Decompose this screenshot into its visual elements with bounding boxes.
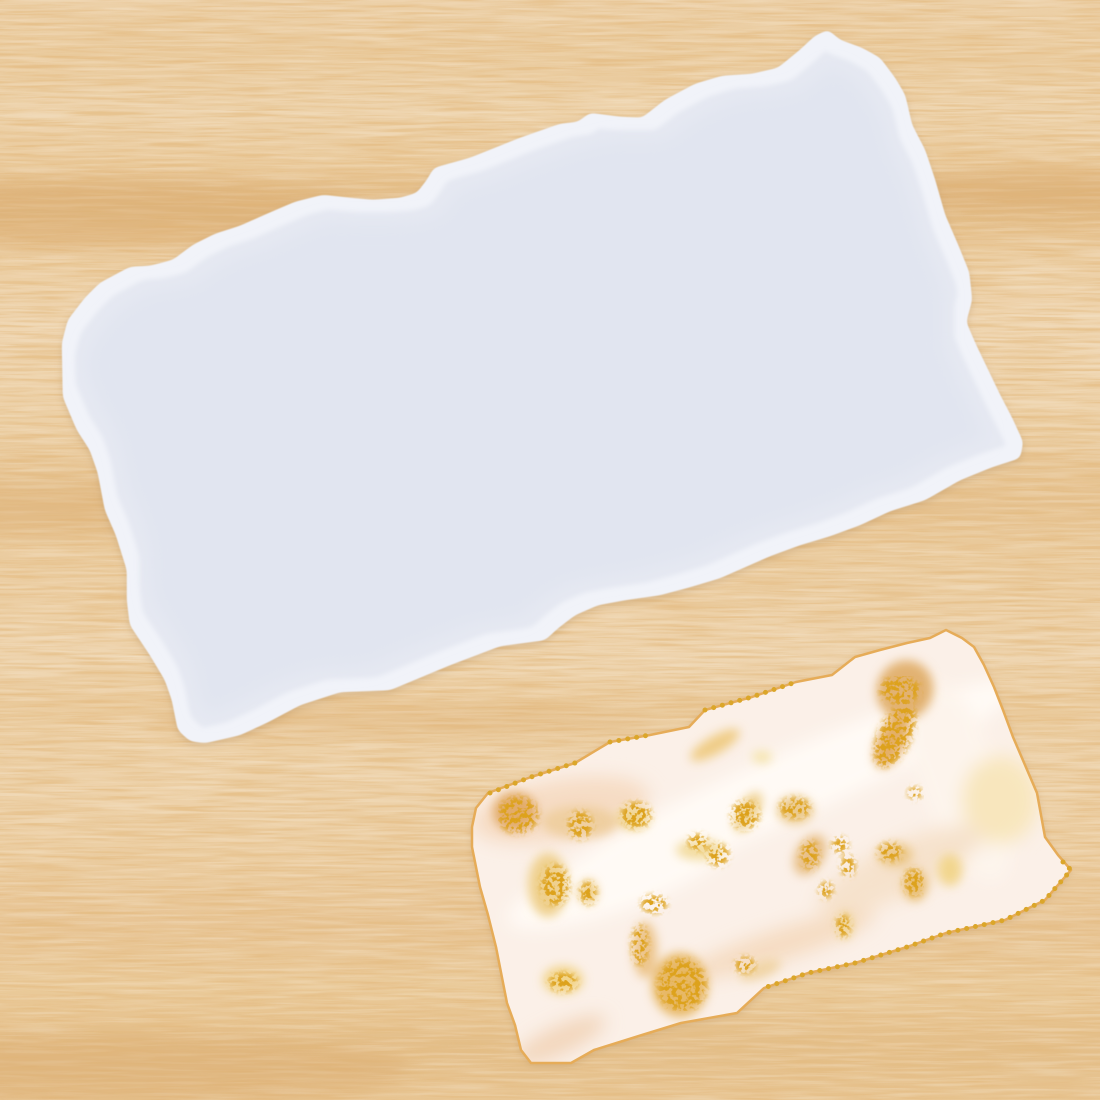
gold flakes (498, 676, 924, 1011)
mold inner basin (62, 30, 1023, 743)
tray base (473, 632, 1069, 1062)
tray gold beads (490, 682, 1071, 988)
mold outer rim (62, 30, 1023, 743)
creamy marble veins (474, 684, 1040, 1062)
mold basin floor (62, 30, 1023, 743)
resin tray (460, 620, 1080, 1080)
amber stains (493, 651, 962, 1017)
tray shadow (472, 632, 1071, 1065)
tray edge tint (472, 630, 1071, 1063)
silicone mold (62, 30, 1023, 746)
mold shadow (62, 33, 1023, 746)
